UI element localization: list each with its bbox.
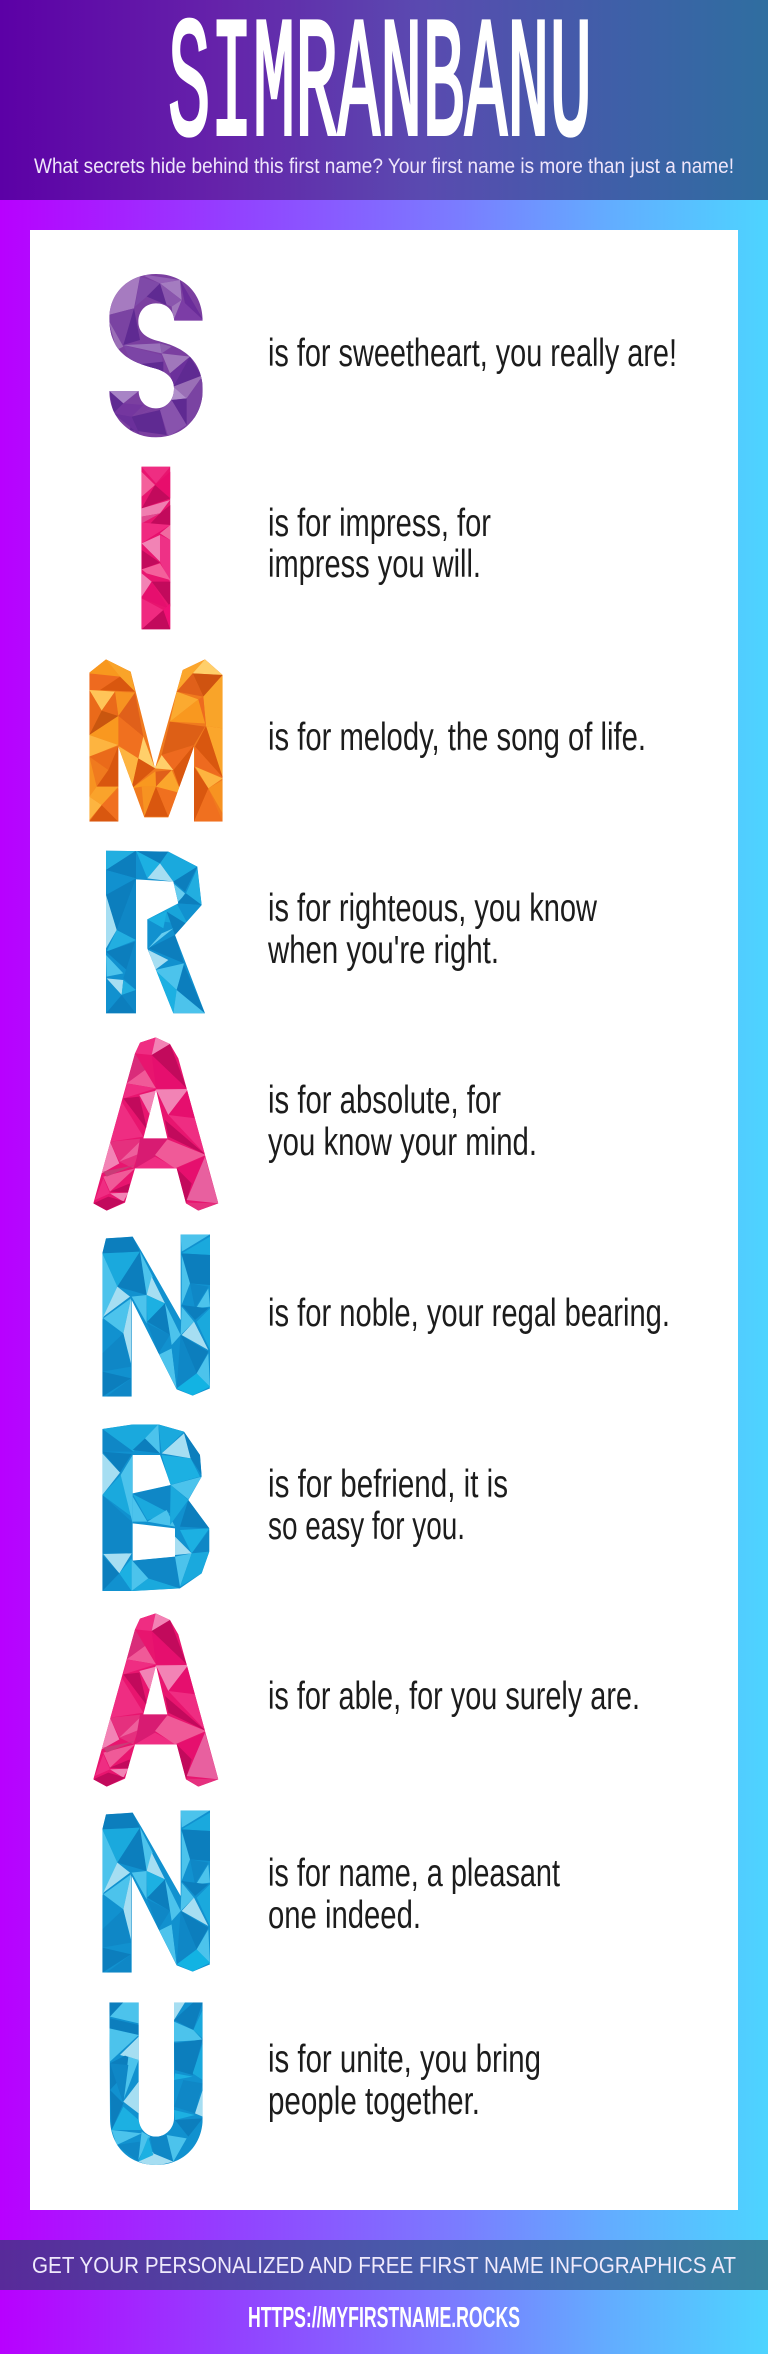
icon: polygon letter A <box>90 1609 223 1789</box>
row: R <box>103 848 598 1015</box>
text: B lines: is for befriend, it is <box>268 1463 508 1506</box>
row: I <box>141 467 491 629</box>
row: B <box>100 1422 508 1593</box>
text: R lines: is for righteous, you know <box>268 887 598 930</box>
icon: polygon letter R <box>103 848 207 1015</box>
text: second N lines: is for name, a pleasant <box>268 1852 560 1895</box>
text: M line: is for melody, the song of life. <box>268 716 646 759</box>
icon: polygon letter M <box>87 657 227 823</box>
footer band <box>0 2240 768 2290</box>
text: I lines <box>268 502 491 586</box>
text: A lines <box>268 1079 537 1164</box>
row: M <box>87 657 646 823</box>
row: A second <box>90 1609 640 1789</box>
text: I lines: impress you will. <box>268 543 481 586</box>
text: U lines <box>268 2038 541 2123</box>
text: U lines: is for unite, you bring <box>268 2038 541 2081</box>
row: N second <box>100 1809 560 1976</box>
text: R lines: when you're right. <box>267 929 499 972</box>
icon: polygon letter N <box>100 1809 213 1976</box>
text: U lines: people together. <box>268 2080 480 2123</box>
text: A lines: is for absolute, for <box>268 1079 501 1122</box>
footer url: HTTPS://MYFIRSTNAME.ROCKS <box>248 2302 520 2334</box>
text: I lines: is for impress, for <box>268 502 491 545</box>
icon: polygon letter A <box>90 1033 223 1213</box>
icon: polygon letter I <box>141 467 170 629</box>
row: S <box>107 270 677 440</box>
icon: polygon letter N <box>100 1233 213 1400</box>
row: A <box>90 1033 537 1213</box>
icon: polygon letter S <box>107 270 207 440</box>
row: U <box>107 2000 541 2167</box>
text: A lines: you know your mind. <box>268 1121 537 1164</box>
row: N <box>100 1233 670 1400</box>
text: second N lines: one indeed. <box>268 1894 421 1937</box>
header band <box>0 0 768 200</box>
text: second A line: is for able, for you surely are. <box>268 1675 640 1718</box>
text: B lines <box>268 1463 508 1548</box>
panel: white letters panel <box>30 230 738 2210</box>
text: R lines <box>267 887 598 972</box>
text: B lines: so easy for you. <box>268 1505 465 1548</box>
icon: polygon letter U <box>107 2000 205 2167</box>
text: second N lines <box>268 1852 560 1937</box>
icon: polygon letter B <box>100 1422 212 1593</box>
